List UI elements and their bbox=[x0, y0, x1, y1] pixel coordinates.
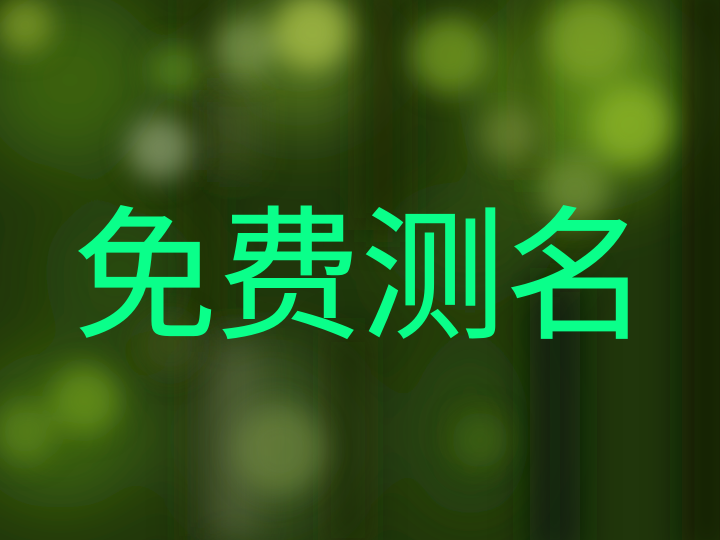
dark trunks bbox=[188, 0, 216, 540]
light trunk bbox=[215, 340, 259, 540]
bokeh spots bbox=[0, 0, 53, 53]
title: 免费测名 bbox=[73, 197, 649, 358]
